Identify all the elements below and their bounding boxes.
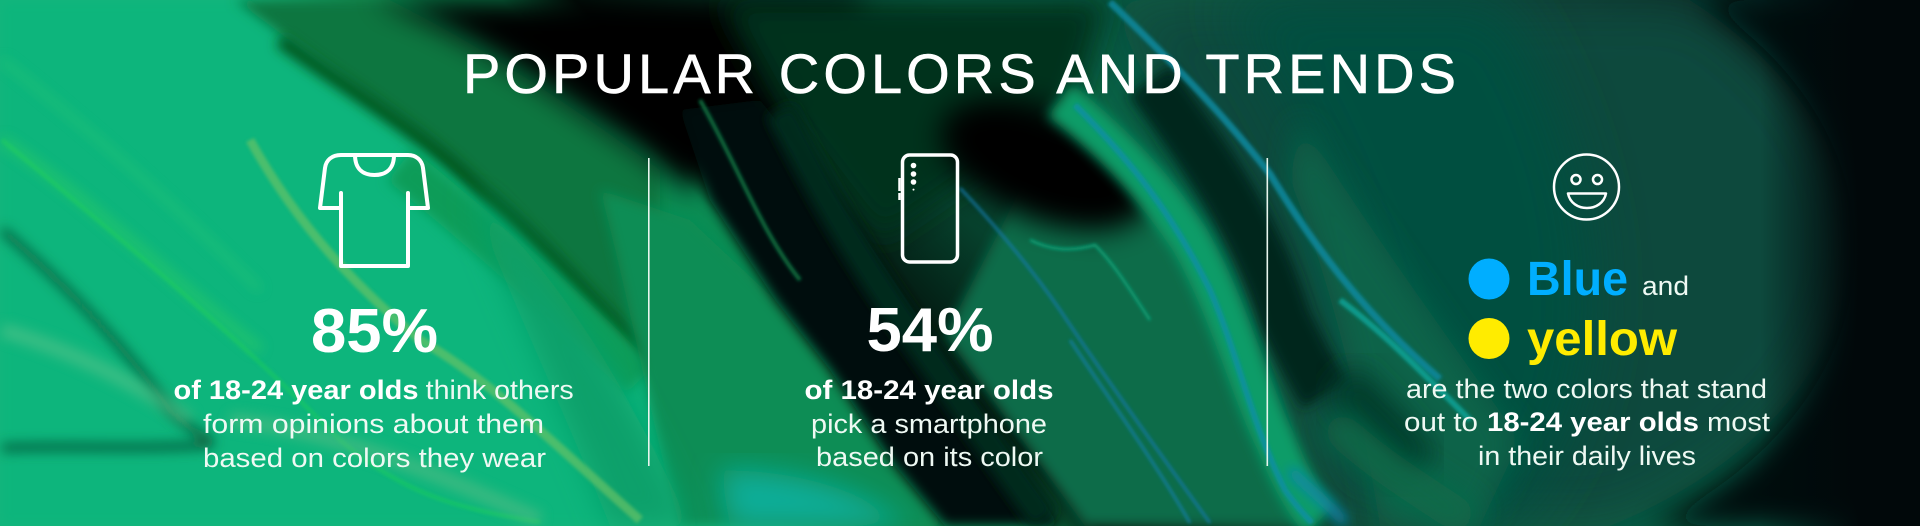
stat: 85%: 85%: [311, 297, 438, 366]
description text: are the two colors that stand: [1406, 374, 1767, 404]
description text: [174, 375, 574, 473]
description text: in their daily lives: [1478, 441, 1696, 471]
dark green band: [235, 0, 660, 370]
black diagonal stripe: [680, 100, 1060, 526]
description text: 18-24 year olds: [1487, 407, 1699, 437]
dark band right of ribbon: [1150, 80, 1325, 395]
dark patch: [922, 73, 1168, 257]
label: Blue: Blue: [1527, 253, 1628, 306]
panel: smartphone statistic: [804, 155, 1054, 472]
mid green body: [945, 110, 1320, 526]
label: yellow: yellow: [1527, 313, 1678, 366]
title: POPULAR COLORS AND TRENDS: [463, 42, 1456, 105]
divider right: [1266, 158, 1268, 466]
stat: 54%: 54%: [866, 296, 994, 365]
icon: smiley face: [1554, 154, 1619, 220]
divider left: [648, 158, 650, 466]
black top: [372, 0, 860, 190]
description text: out to: [1404, 407, 1478, 437]
label: and: and: [1642, 271, 1689, 301]
swatch: blue: [1468, 258, 1510, 300]
ribbons: [1060, 100, 1320, 520]
description text: based on colors they wear: [203, 443, 546, 473]
swatch: yellow: [1468, 318, 1510, 359]
bright green mid band: [600, 190, 945, 526]
description text: pick a smartphone: [811, 409, 1047, 439]
description text: of 18-24 year olds: [804, 375, 1054, 405]
description text: [804, 375, 1054, 472]
description text: most: [1707, 407, 1771, 437]
streaks in left field: [2, 140, 540, 522]
description text: think others: [426, 375, 574, 405]
icon: t-shirt: [320, 155, 428, 266]
right vignette: [1650, 0, 1920, 526]
description text: [1404, 374, 1771, 471]
description text: of 18-24 year olds: [174, 375, 418, 405]
panel: t-shirt statistic: [174, 155, 574, 473]
description text: based on its color: [816, 442, 1043, 472]
description text: form opinions about them: [203, 409, 544, 439]
left field: [0, 0, 700, 526]
panel: blue and yellow statistic: [1404, 154, 1771, 471]
icon: smartphone: [900, 155, 958, 262]
lower ribbon of right panel: [1330, 420, 1470, 523]
dark green top middle: [720, 0, 1110, 240]
